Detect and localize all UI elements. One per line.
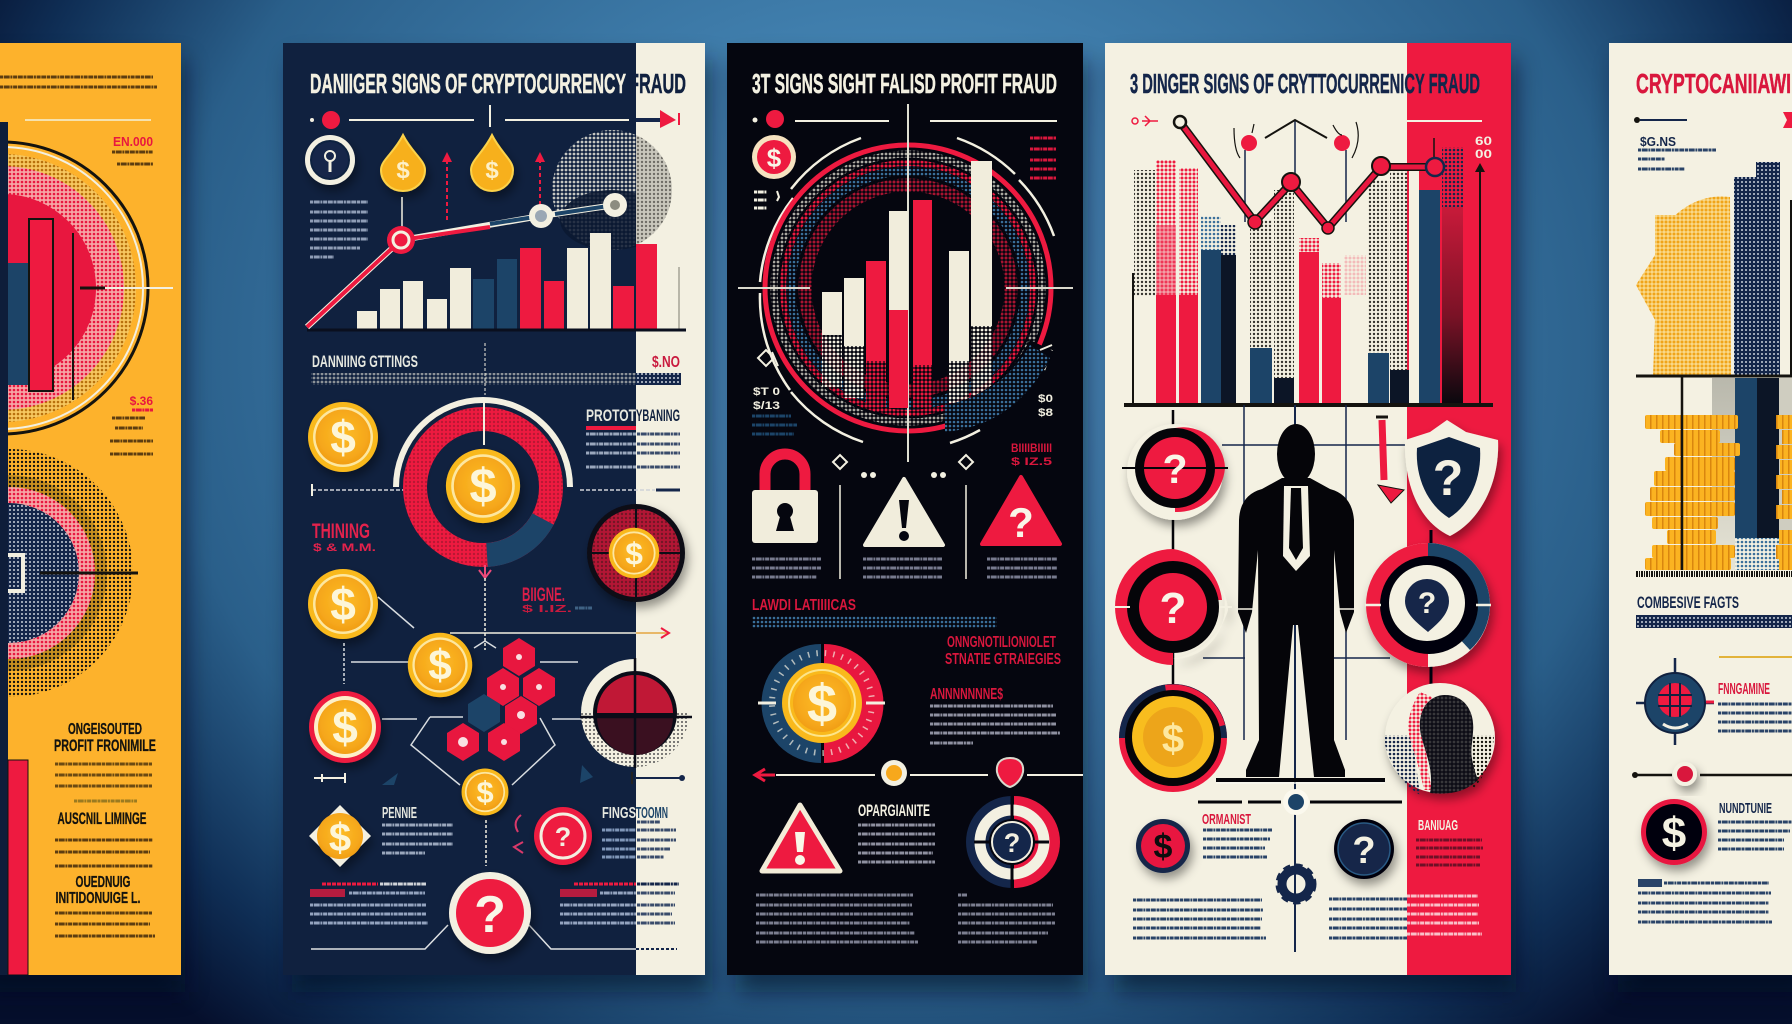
small labels left: [754, 191, 779, 208]
top ornaments: [1132, 116, 1482, 126]
line chart: [307, 193, 627, 327]
red label: $ IZ.5: [1011, 456, 1052, 468]
connector lines: [344, 597, 636, 785]
panel: navy danger signs: [283, 43, 705, 975]
question circle: [534, 807, 592, 865]
title: DANIIGER SIGNS OF CRYPTOCURRENCY: [310, 68, 626, 99]
section heading: DANNIING GTTINGS: [312, 352, 418, 371]
question target 1: [1122, 424, 1228, 520]
title: 3 DINGER SIGNS OF CRYTTOCURRENICY FRAUD: [1130, 68, 1480, 99]
icon: warning red question: [982, 477, 1060, 546]
heading: profit: ONGEISOUTED: [68, 721, 142, 738]
labels bottom right: $0: [1038, 393, 1053, 405]
icon: dollar badge: $: [767, 143, 782, 173]
bar chart: [307, 233, 686, 330]
question target: ?: [1004, 828, 1020, 858]
diamond small left: [758, 350, 778, 366]
red bar: [8, 760, 28, 975]
icon: red warning: [762, 805, 840, 871]
top rule: [752, 110, 1057, 128]
coin 2: [308, 569, 378, 639]
panel: cream right: [1609, 43, 1792, 975]
central target with coin: [396, 400, 570, 555]
label thinking: $ & M.M.: [313, 542, 376, 554]
circular chart: [738, 104, 1073, 462]
label bignet: [522, 585, 592, 615]
icon: drop 2: [471, 135, 513, 191]
label thinking: THINING: [312, 520, 370, 543]
text: prototype: YBANING: [636, 406, 680, 425]
labels bottom left: $T 0: [753, 386, 780, 398]
value label bottom: $.36: [130, 394, 153, 408]
icon: red dollar: [1136, 819, 1190, 873]
small label: $G.NS: [1640, 134, 1676, 149]
subline: [74, 800, 137, 802]
text: fnngamine: [1718, 681, 1792, 731]
heading: third: [56, 876, 140, 904]
big question circle: ?: [474, 886, 506, 944]
icon: navy question: [1334, 819, 1394, 879]
dotted band: [311, 343, 681, 395]
bars: [822, 161, 992, 408]
text: prototype: [586, 406, 680, 467]
gold coin badge: $: [1162, 717, 1184, 761]
shield: [1405, 420, 1498, 536]
header text lines: [0, 77, 157, 87]
icon: navy question: ?: [1352, 830, 1376, 872]
red heading: STNATIE GTRAIEGIES: [945, 651, 1061, 668]
text block bottom left: [310, 884, 428, 923]
dotted band: [752, 616, 997, 628]
icon: dollar badge: [752, 135, 796, 179]
down arrow and dashed line: [479, 565, 491, 650]
vertical connector: [1172, 410, 1174, 690]
text: awareness: ANNNNNNNE$: [930, 686, 1003, 703]
title: FRAUD: [629, 68, 686, 99]
icon: black dollar: $: [1662, 809, 1686, 858]
dotted band: [1636, 615, 1792, 628]
labels bottom left: [752, 386, 797, 434]
arrow right: [636, 628, 669, 638]
text block 3: [55, 913, 155, 936]
dotted sphere: [552, 130, 672, 250]
person silhouette: [1216, 424, 1385, 783]
dotted bar chart: [1636, 162, 1792, 376]
panel: yellow left: [0, 43, 181, 975]
text: financing: TOOMN: [636, 805, 668, 822]
line chart with nodes: [1174, 116, 1444, 234]
coin 4 red ring: [309, 691, 381, 763]
target ring: [580, 658, 692, 768]
text block bottom left: [1133, 900, 1266, 938]
bottom text block: [1638, 879, 1772, 922]
heading: second: AUSCNIL LIMINGE: [58, 809, 146, 828]
small label: [1638, 134, 1716, 169]
title: [310, 68, 686, 99]
heading: third: INITIDONUIGE L.: [56, 890, 140, 907]
gold coin badge: [1119, 684, 1227, 792]
coin 1: [308, 402, 378, 472]
dark red coin circle: $: [625, 536, 643, 572]
red label: BIIIIBIIIII: [1011, 441, 1052, 455]
text block: [55, 764, 152, 786]
coin 5: [462, 769, 508, 815]
coin dial: [758, 644, 885, 763]
icon: red dollar: $: [1154, 828, 1173, 866]
grid lines: [1203, 405, 1407, 952]
red labels top right: [1030, 138, 1056, 178]
question target 1: ?: [1162, 446, 1188, 492]
shield: ?: [1433, 450, 1463, 506]
coin stacks: [1645, 415, 1792, 570]
icon: black dollar: [1641, 799, 1707, 865]
value labels: 60: [1475, 134, 1492, 148]
pink chevrons: [514, 815, 523, 853]
value labels 2: 00: [1475, 147, 1492, 161]
icon: warning red question: ?: [1008, 499, 1034, 546]
connector horizontal: [312, 484, 680, 496]
value label top: EN.000: [113, 134, 153, 149]
icon: drop 1: $: [396, 157, 410, 184]
lower bars: [1712, 378, 1792, 570]
central target with coin: $: [469, 460, 497, 514]
text block bottom right: [560, 884, 679, 923]
red label: [1011, 441, 1052, 468]
icon: drop 2: $: [485, 157, 499, 184]
coin 3: [408, 633, 472, 697]
heading: profit: [54, 722, 156, 752]
coin dial: $: [807, 674, 837, 734]
hexagon cluster: [447, 638, 555, 761]
text: opargianite: [858, 801, 935, 862]
value label bottom: [110, 394, 153, 454]
text: awareness: [930, 686, 1060, 743]
stack axis: [1681, 376, 1683, 570]
red heading: [945, 634, 1061, 668]
dotted head portrait: [1385, 683, 1495, 795]
question target 2: ?: [1160, 584, 1186, 633]
labels bottom right: $8: [1038, 407, 1053, 419]
red heading: ONNGNOTILIONIOLET: [947, 634, 1056, 651]
question target: [966, 795, 1060, 890]
labels bottom left: $/13: [753, 400, 780, 412]
timeline: [1632, 762, 1792, 786]
section heading: [312, 352, 680, 371]
text block: [310, 202, 368, 257]
section heading: LAWDI LATIIIICAS: [752, 597, 856, 614]
section heading: $.NO: [652, 354, 680, 371]
text: financing: [602, 805, 676, 857]
icon: gear: [1278, 866, 1314, 902]
coin 3: $: [428, 642, 452, 689]
down arrow: [1376, 417, 1404, 503]
text under icons: [752, 559, 1057, 577]
small marks row: [314, 765, 685, 785]
diamond coin: [309, 805, 371, 867]
label thinking: [312, 520, 376, 554]
timeline: [1198, 789, 1402, 815]
text: banking: [1416, 817, 1483, 865]
big question circle: [311, 820, 677, 954]
title: 3T SIGNS SIGHT FALISD PROFIT FRAUD: [752, 68, 1057, 99]
label bignet: BIIGNE.: [522, 585, 565, 606]
small ornaments: [833, 455, 973, 579]
bottom text blocks: [756, 895, 1055, 942]
text: financing: FINGS: [602, 805, 636, 822]
dark red coin circle: [587, 504, 685, 602]
top rule: [310, 105, 679, 129]
panel: black false profit: [727, 43, 1083, 975]
labels bottom right: [1038, 393, 1053, 419]
question pin target: [1365, 530, 1491, 685]
grouped bar chart: [1124, 147, 1493, 405]
dashed baseline: [1636, 571, 1792, 577]
text: banking: BANIUAG: [1418, 817, 1458, 834]
dotted blob: [945, 340, 1055, 432]
icon: lock: [752, 454, 818, 543]
heading: third: OUEDNUIG: [76, 874, 130, 891]
heading: profit: PROFIT FRONIMILE: [54, 736, 156, 755]
text block bottom right: [1329, 896, 1482, 938]
icon: globe target: [1636, 658, 1714, 745]
diamond coin: $: [329, 816, 351, 860]
text: pennie: [382, 805, 453, 853]
text: opargianite: OPARGIANITE: [858, 801, 930, 820]
dark edge bar: [0, 122, 8, 975]
rule: [25, 119, 151, 121]
lower ring chart: [0, 449, 138, 697]
value label top: [112, 134, 153, 164]
upper ring chart: [0, 142, 173, 434]
icon: key ring: [305, 135, 355, 185]
text: nundtunie: [1718, 800, 1792, 849]
icon: drop 1: [381, 135, 425, 191]
panel: cream with red strip: [1105, 43, 1511, 975]
icon: warning cream: [865, 479, 943, 545]
coin 4 red ring: $: [332, 701, 358, 753]
label bignet: $ I.IZ.: [522, 604, 572, 615]
rule: [1634, 112, 1792, 128]
text: orman: ORMANIST: [1202, 811, 1251, 828]
coin 2: $: [330, 578, 356, 630]
arrows up: [442, 152, 545, 220]
coin 1: $: [330, 411, 356, 463]
gold rule: [1719, 656, 1792, 658]
question target 2: [1115, 549, 1232, 665]
text: orman: [1202, 811, 1272, 857]
text block 2: [55, 840, 153, 866]
timeline: [755, 758, 1083, 787]
question circle: ?: [555, 822, 571, 852]
text: prototype: PROTOT: [586, 406, 636, 425]
coin 5: $: [476, 775, 494, 810]
question pin target: ?: [1418, 587, 1436, 620]
text: pennie: PENNIE: [382, 805, 417, 822]
